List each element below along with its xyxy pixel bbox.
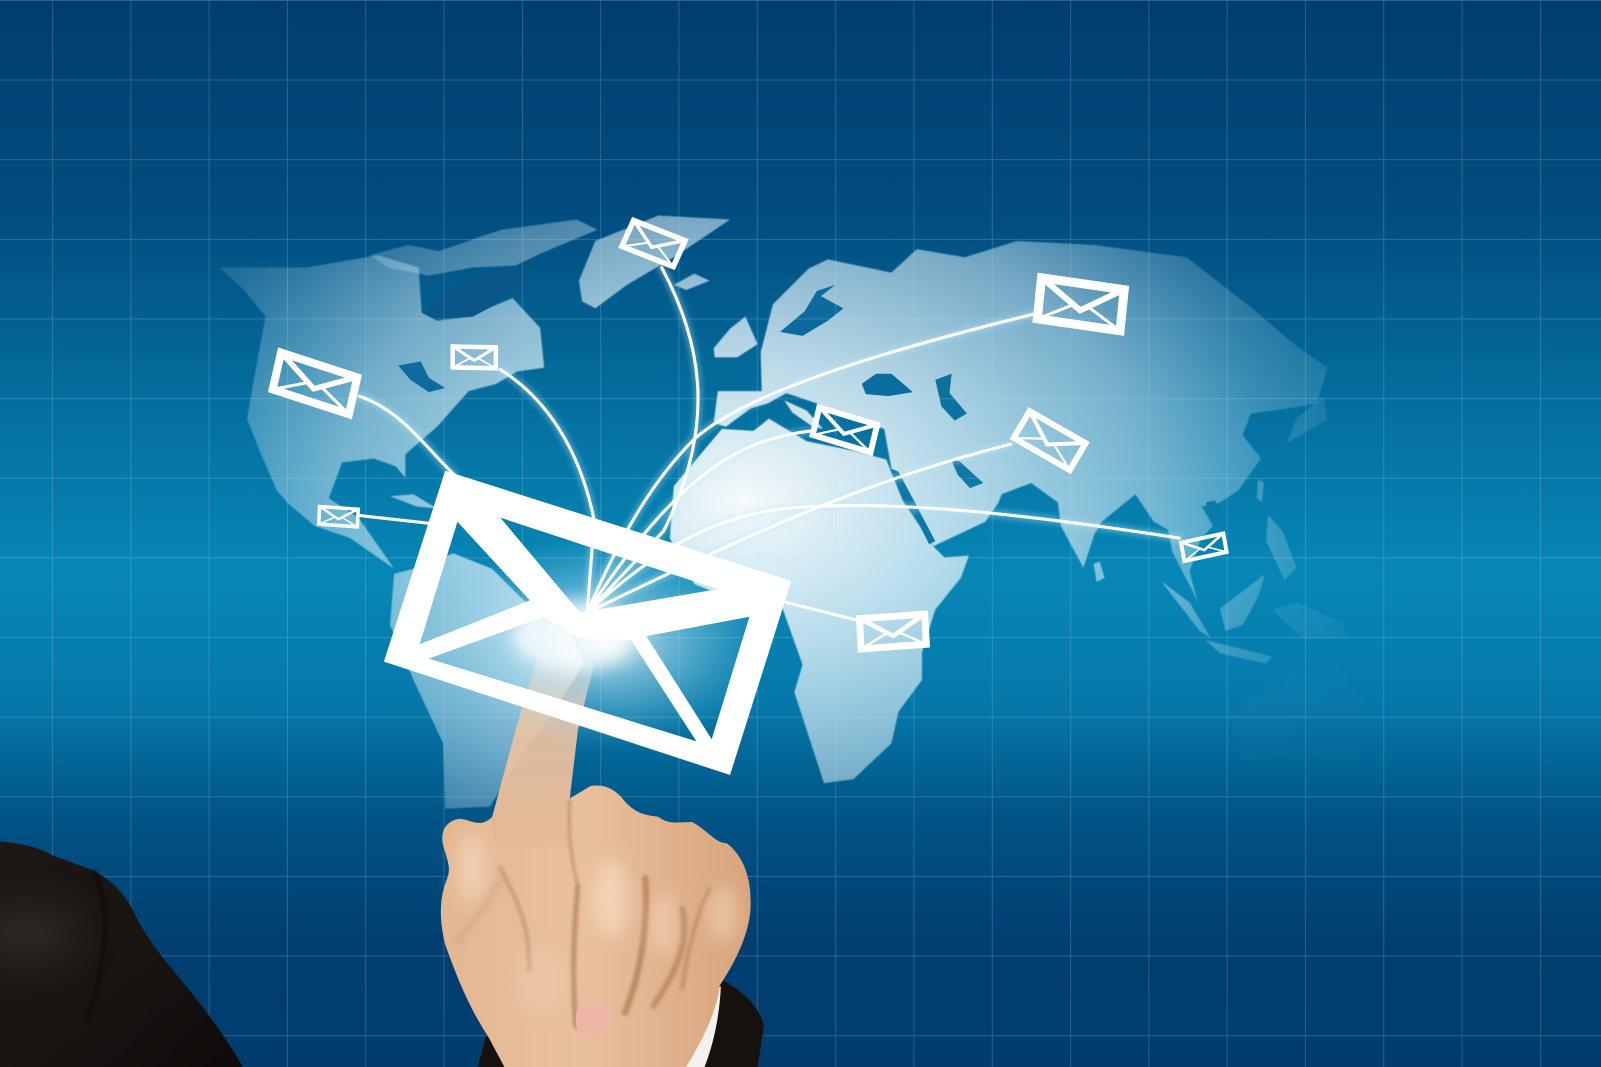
suit shoulder xyxy=(0,841,243,1067)
icon: envelope southeast asia xyxy=(1181,533,1227,561)
suit seam xyxy=(87,870,105,1021)
map: Sumatra xyxy=(1161,581,1211,638)
map: Australia xyxy=(1230,664,1373,761)
hand pointing xyxy=(441,653,764,1067)
map: Japan xyxy=(1287,396,1327,443)
glow at envelope fold xyxy=(513,600,635,670)
map: Borneo xyxy=(1220,574,1265,631)
right sleeve xyxy=(478,980,764,1067)
middle finger nail xyxy=(576,1003,611,1039)
suit sheen xyxy=(0,904,82,965)
line: to Asia envelope xyxy=(587,444,1011,613)
line: to Mediterranean envelope xyxy=(587,431,812,613)
index finger xyxy=(492,653,594,847)
line: to Russia envelope xyxy=(587,313,1036,613)
knuckle shadows xyxy=(498,800,712,1030)
finger highlights xyxy=(457,833,737,1017)
map: Italy xyxy=(784,400,823,429)
map: Taiwan xyxy=(1257,480,1264,502)
map: Eurasia xyxy=(714,241,1327,601)
map: Sri Lanka xyxy=(1094,562,1105,582)
hand body xyxy=(441,785,751,1067)
sea: Persian Gulf xyxy=(951,458,983,488)
sea: Black Sea xyxy=(862,374,913,396)
connection lines glow xyxy=(359,268,1179,613)
sea: Great Lakes xyxy=(398,361,445,392)
map: seas and lakes xyxy=(398,266,1222,544)
world map xyxy=(220,215,1373,809)
icon: envelope russia xyxy=(1037,278,1124,331)
icon: envelope central asia xyxy=(1014,411,1086,470)
map: Arctic islands xyxy=(370,220,597,276)
line: to Africa envelope xyxy=(786,602,856,620)
map: Philippines xyxy=(1266,515,1297,580)
line: to Canada envelope xyxy=(500,370,594,613)
hand shading xyxy=(454,800,742,1030)
map: Britain and Ireland xyxy=(714,317,758,357)
icon: envelope canada xyxy=(453,346,496,368)
sea: Baltic xyxy=(780,285,843,336)
map: Cuba xyxy=(390,494,437,508)
map: South America xyxy=(390,553,584,809)
connection lines xyxy=(359,268,1179,620)
line: to Mexico envelope xyxy=(360,516,434,524)
icon: envelope mexico xyxy=(319,506,358,527)
icon: envelope north america xyxy=(273,353,357,414)
icon: main envelope xyxy=(384,471,791,775)
map: Iceland xyxy=(674,274,710,290)
sea: Red Sea edge xyxy=(891,469,935,544)
sea: Caspian xyxy=(935,374,967,421)
glow under connection lines xyxy=(429,534,776,748)
map: North America xyxy=(220,255,544,569)
icon: envelope mediterranean xyxy=(813,407,877,452)
sea: Hudson Bay xyxy=(422,266,528,321)
map: Greenland xyxy=(579,215,730,308)
line: to Southeast Asia envelope xyxy=(587,506,1179,613)
map: Africa xyxy=(670,419,969,783)
shirt cuff xyxy=(494,986,721,1067)
icon: envelope greenland xyxy=(622,220,685,267)
line: to North America envelope xyxy=(359,396,454,475)
map: Java xyxy=(1206,640,1272,664)
sea: Gulf of Tonkin xyxy=(1206,500,1222,521)
thumb shadow xyxy=(454,878,500,944)
icon: envelope africa xyxy=(859,614,926,649)
line: to Greenland envelope xyxy=(587,268,698,613)
map: New Guinea and islands xyxy=(1272,602,1348,638)
